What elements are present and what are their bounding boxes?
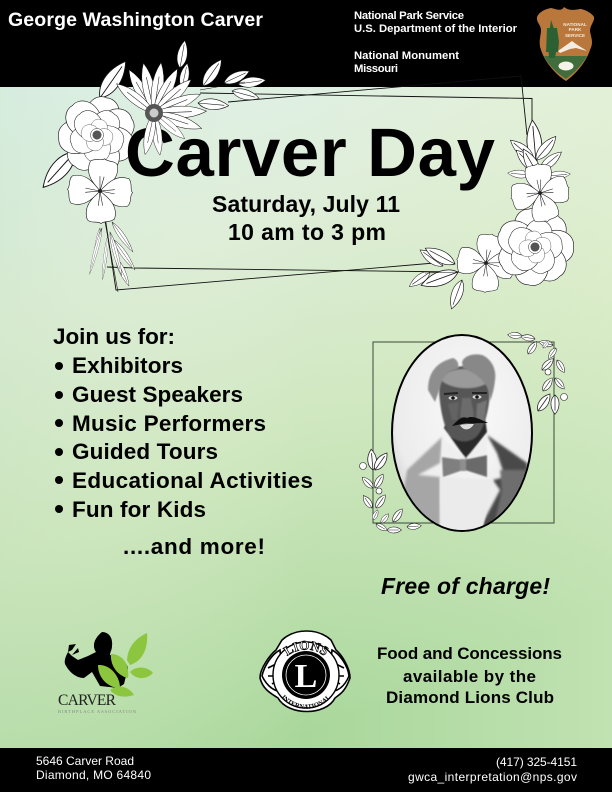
header band <box>0 0 612 87</box>
food and concessions note: Diamond Lions Club <box>386 688 554 707</box>
and more: ....and more! <box>123 534 265 559</box>
collar <box>442 438 466 458</box>
icon: leaves top right <box>507 332 568 414</box>
food and concessions note: Food and Concessions <box>377 644 562 663</box>
date and time: Saturday, July 11 <box>212 191 400 217</box>
face <box>439 366 490 441</box>
date and time: 10 am to 3 pm <box>228 219 386 245</box>
food and concessions note <box>377 644 562 707</box>
floral cluster: top left <box>37 40 266 292</box>
contact details: (417) 325-4151 <box>496 755 577 769</box>
silhouette <box>65 632 128 688</box>
jacket left <box>402 437 442 530</box>
lions club emblem: INTERNATIONAL <box>282 694 330 709</box>
icon: NPS arrowhead: SERVICE <box>565 33 585 38</box>
free of charge: Free of charge! <box>381 573 550 599</box>
footer band <box>0 748 612 792</box>
address: Diamond, MO 64840 <box>36 768 151 782</box>
agency text block: U.S. Department of the Interior <box>354 23 518 35</box>
icon: NPS arrowhead: PARK <box>569 27 582 32</box>
food and concessions note: available by the <box>403 667 536 686</box>
bullet list: Exhibitors <box>72 353 183 378</box>
portrait frame with leaves <box>360 332 568 533</box>
bullet list: Guest Speakers <box>72 382 243 407</box>
daisy <box>113 62 207 156</box>
list: join us for <box>53 324 313 522</box>
contact details: gwca_interpretation@nps.gov <box>408 770 577 784</box>
shirt <box>440 477 493 532</box>
icon: NPS arrowhead <box>537 7 594 81</box>
contact details <box>408 755 577 784</box>
facial features <box>444 393 487 394</box>
neck <box>443 419 488 460</box>
lions club emblem: L <box>295 658 317 695</box>
bullet list: Fun for Kids <box>72 497 206 522</box>
bullet list <box>55 353 313 522</box>
agency text block: Missouri <box>354 63 398 75</box>
address <box>36 754 151 782</box>
bullet list: Music Performers <box>72 411 266 436</box>
bullet list: Educational Activities <box>72 468 313 493</box>
floral cluster: bottom right <box>407 120 583 311</box>
carver logo: CARVER <box>58 692 117 709</box>
agency text block: National Park Service <box>354 10 464 22</box>
hair <box>428 354 495 402</box>
green leaves <box>98 633 153 697</box>
carver logo <box>58 632 153 714</box>
lions club emblem <box>259 630 351 712</box>
jacket right <box>482 434 528 526</box>
date and time <box>212 191 400 245</box>
bow tie <box>442 457 463 477</box>
geometric frame <box>105 76 532 290</box>
icon: NPS arrowhead: NATIONAL <box>563 22 587 27</box>
icon: leaves bottom left <box>360 449 422 533</box>
list: join us for: Join us for: <box>53 324 175 349</box>
park name: George Washington Carver <box>8 9 263 31</box>
title: Carver Day <box>125 114 495 191</box>
agency text block: National Monument <box>354 50 459 62</box>
agency text block <box>354 10 518 75</box>
lions club emblem: LIONS <box>282 640 329 656</box>
bullet list: Guided Tours <box>72 439 218 464</box>
carver logo: BIRTHPLACE ASSOCIATION <box>58 709 137 714</box>
portrait of George Washington Carver <box>392 335 532 532</box>
address: 5646 Carver Road <box>36 754 134 768</box>
